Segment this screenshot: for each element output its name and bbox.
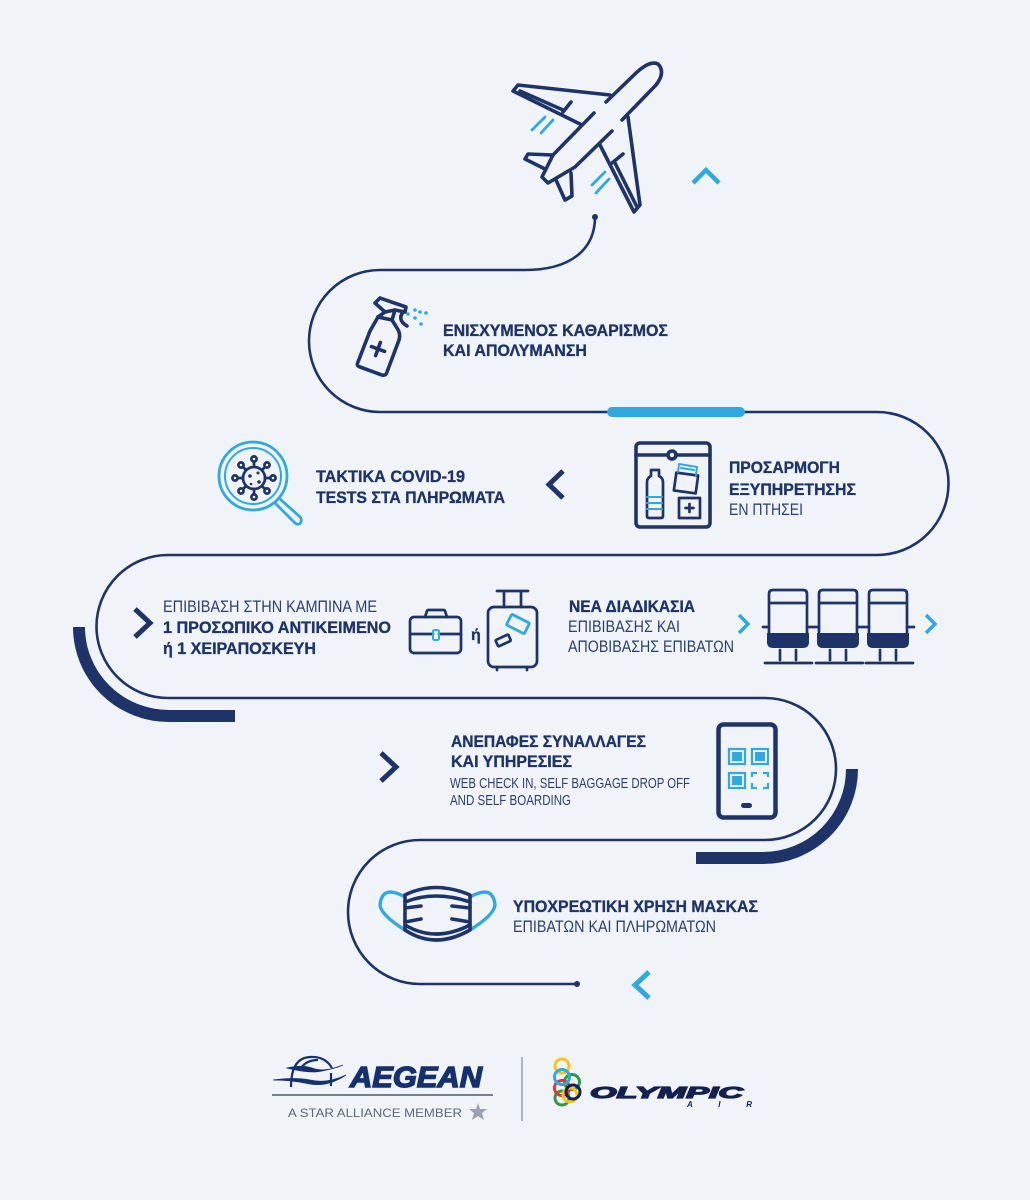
text: contactless transactions: ΚΑΙ ΥΠΗΡΕΣΙΕΣ — [451, 752, 572, 771]
divider — [521, 1057, 523, 1121]
text: in-flight service: ΠΡΟΣΑΡΜΟΓΗ — [729, 458, 840, 477]
logo: Aegean — [272, 1057, 493, 1120]
text: cabin baggage — [163, 597, 391, 658]
icon: briefcase — [410, 610, 461, 653]
text: in-flight service: ΕΝ ΠΤΗΣΕΙ — [729, 500, 803, 519]
navy left curve accent — [79, 627, 235, 716]
logo: Olympic Air — [554, 1059, 752, 1109]
logo: Olympic Air: A I R — [686, 1100, 752, 1109]
arrow: left chevron — [549, 471, 563, 498]
icon: face mask — [380, 888, 495, 940]
text: enhanced cleaning — [443, 321, 668, 360]
text: new boarding procedure — [568, 597, 734, 656]
text: covid tests — [316, 467, 505, 507]
arrow: navy right chevron — [381, 753, 396, 781]
text: mandatory mask: ΕΠΙΒΑΤΩΝ ΚΑΙ ΠΛΗΡΩΜΑΤΩΝ — [513, 917, 716, 936]
navy right curve accent — [696, 769, 852, 858]
icon: spray bottle — [357, 298, 428, 375]
logo: Olympic Air: OLYMPIC — [590, 1085, 744, 1102]
blue route highlight — [612, 407, 740, 417]
text: enhanced cleaning: ΕΝΙΣΧΥΜΕΝΟΣ ΚΑΘΑΡΙΣΜΟΣ — [443, 321, 668, 340]
text: new boarding procedure: ΝΕΑ ΔΙΑΔΙΚΑΣΙΑ — [569, 597, 695, 616]
icon: airplane — [513, 63, 662, 212]
arrow: blue right chevron — [739, 615, 748, 633]
text: contactless transactions: ΑΝΕΠΑΦΕΣ ΣΥΝΑΛΛΑΓΕΣ — [451, 732, 646, 751]
text: contactless transactions: WEB CHECK IN, SELF BAGGAGE DROP OFF — [450, 775, 690, 792]
text: contactless transactions: AND SELF BOARDING — [450, 792, 571, 809]
arrow: right chevron — [135, 609, 150, 637]
logo: Aegean: AEGEAN — [349, 1062, 483, 1094]
text: mandatory mask — [513, 897, 758, 936]
text: cabin baggage: ή 1 ΧΕΙΡΑΠΟΣΚΕΥΗ — [163, 639, 316, 658]
arrow: blue right chevron 2 — [926, 615, 935, 633]
text: enhanced cleaning: ΚΑΙ ΑΠΟΛΥΜΑΝΣΗ — [443, 341, 587, 360]
arrow: up chevron — [693, 170, 719, 183]
text: new boarding procedure: ΑΠΟΒΙΒΑΣΗΣ ΕΠΙΒΑΤΩΝ — [568, 637, 734, 656]
text: new boarding procedure: ΕΠΙΒΙΒΑΣΗΣ ΚΑΙ — [568, 617, 680, 636]
text: in-flight service — [729, 458, 856, 519]
icon: phone with QR — [718, 724, 776, 818]
icon: seats — [763, 590, 914, 663]
icon: suitcase — [488, 591, 537, 670]
text: cabin baggage: ΕΠΙΒΙΒΑΣΗ ΣΤΗΝ ΚΑΜΠΙΝΑ ΜΕ — [163, 597, 377, 616]
logo: Aegean: A STAR ALLIANCE MEMBER — [288, 1106, 462, 1120]
arrow: blue left chevron — [635, 972, 649, 998]
text: covid tests: ΤΑΚΤΙΚΑ COVID-19 — [316, 467, 465, 486]
text: cabin baggage: 1 ΠΡΟΣΩΠΙΚΟ ΑΝΤΙΚΕΙΜΕΝΟ — [163, 618, 391, 637]
icon: service bag — [636, 443, 710, 527]
text: or: ή — [471, 627, 481, 644]
text: mandatory mask: ΥΠΟΧΡΕΩΤΙΚΗ ΧΡΗΣΗ ΜΑΣΚΑΣ — [513, 897, 758, 916]
text: in-flight service: ΕΞΥΠΗΡΕΤΗΣΗΣ — [729, 480, 856, 499]
icon: magnifier with virus — [219, 442, 301, 524]
winding route line — [96, 214, 948, 987]
text: contactless transactions — [450, 732, 690, 809]
text: covid tests: TESTS ΣΤΑ ΠΛΗΡΩΜΑΤΑ — [316, 488, 505, 507]
